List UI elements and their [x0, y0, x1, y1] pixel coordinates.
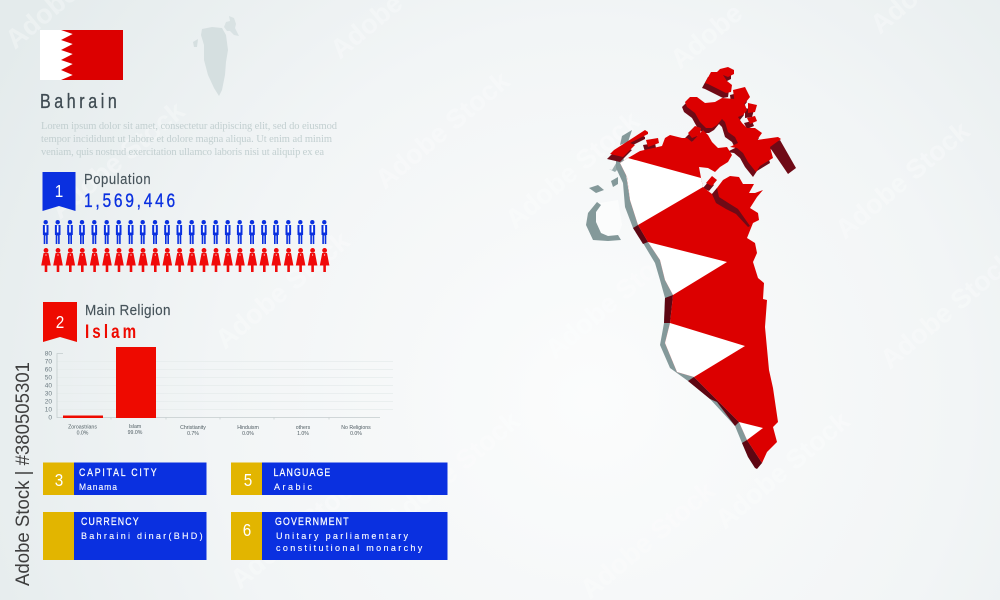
card: government: [231, 512, 448, 560]
east arm extrusion: [768, 140, 796, 174]
white triangles: [620, 158, 763, 440]
card: currency: [43, 512, 206, 560]
stock credit vertical text: Adobe Stock | #380505301: [13, 362, 34, 586]
population value: 1,569,446: [84, 189, 175, 211]
y axis labels: 20: [45, 398, 52, 406]
religion label: Main Religion: [85, 302, 171, 319]
population label: Population: [84, 171, 151, 187]
lorem text block: veniam, quis nostrud exercitation ullamco laboris nisi ut aliquip ex ea: [41, 147, 324, 158]
bar chart: [45, 347, 393, 437]
card: capital city: 3: [55, 470, 63, 490]
category labels: others: [296, 425, 311, 431]
card: language: LANGUAGE: [274, 467, 331, 479]
lorem text block: [41, 121, 338, 158]
y axis labels: [45, 350, 52, 422]
y axis labels: 70: [45, 358, 52, 366]
category labels: 0.7%: [187, 431, 199, 437]
watermarks: Adobe Stock: [710, 405, 856, 535]
card: language: Arabic: [274, 482, 312, 492]
ribbon 1: [42, 172, 76, 211]
ribbon 2: 2: [56, 312, 64, 332]
category labels: 0.0%: [242, 431, 254, 437]
y axis labels: 80: [45, 350, 52, 358]
ribbon 2: [43, 302, 77, 342]
y axis labels: 50: [45, 374, 52, 382]
watermarks: Adobe Stock: [370, 65, 516, 195]
title: Bahrain: [40, 90, 117, 112]
y axis labels: 0: [48, 414, 52, 422]
panel: population: [41, 171, 329, 272]
dark red coast segments: [633, 225, 762, 469]
female pictogram row: [41, 248, 329, 272]
map red top surface: [620, 130, 778, 463]
card: capital city: CAPITAL CITY: [79, 467, 157, 479]
y axis labels: 60: [45, 366, 52, 374]
category labels: Christianity: [180, 425, 206, 431]
religion value: Islam: [85, 320, 136, 342]
card: language: 5: [244, 470, 252, 490]
card: government: Unitary parliamentary: [276, 531, 408, 541]
y axis labels: 40: [45, 382, 52, 390]
bars: [63, 347, 156, 418]
male pictogram row: [43, 220, 327, 244]
watermarks: Adobe Stock: [45, 95, 191, 225]
watermarks: Adobe Stock: [830, 115, 976, 245]
coast side band: [616, 155, 762, 468]
watermarks: Adobe Stock: [540, 235, 686, 365]
category labels: 0.0%: [350, 431, 362, 437]
y axis labels: 10: [45, 406, 52, 414]
y axis labels: 30: [45, 390, 52, 398]
category labels: [68, 424, 371, 437]
main 3D flag map of Bahrain: [586, 67, 796, 469]
category labels: Hinduism: [237, 425, 259, 431]
watermarks: Adobe Stock: [225, 465, 371, 595]
northern islands: [610, 67, 781, 186]
watermarks: Adobe Stock: [380, 405, 526, 535]
card: currency: Bahraini dinar(BHD): [81, 531, 203, 541]
card: capital city: [43, 462, 206, 495]
card: capital city: Manama: [79, 482, 117, 492]
card: language: [231, 462, 448, 495]
category labels: 0.0%: [77, 430, 89, 436]
card: currency: CURRENCY: [81, 516, 139, 528]
watermarks: Adobe Stock: [210, 225, 356, 355]
category labels: 99.0%: [128, 430, 143, 436]
card: government: 6: [243, 520, 251, 540]
card: government: GOVERNMENT: [275, 516, 349, 528]
watermarks: Adobe Stock: [500, 105, 646, 235]
bay dark inner shore: [712, 188, 750, 227]
island extrusion: [607, 72, 778, 191]
panel: main religion: [43, 302, 393, 437]
western islands: [586, 130, 632, 241]
lorem text block: tempor incididunt ut labore et dolore magna aliqua. Ut enim ad minim: [41, 134, 332, 145]
card: government: constitutional monarchy: [276, 543, 423, 553]
flag of Bahrain: [40, 30, 123, 80]
category labels: No Religions: [341, 425, 371, 431]
mini map silhouette: [193, 16, 239, 96]
category labels: Islam: [129, 424, 141, 430]
lorem text block: Lorem ipsum dolor sit amet, consectetur adipiscing elit, sed do eiusmod: [41, 121, 338, 132]
ribbon 1: 1: [55, 181, 63, 201]
category labels: Zoroastrians: [68, 424, 97, 430]
category labels: 1.0%: [297, 431, 309, 437]
